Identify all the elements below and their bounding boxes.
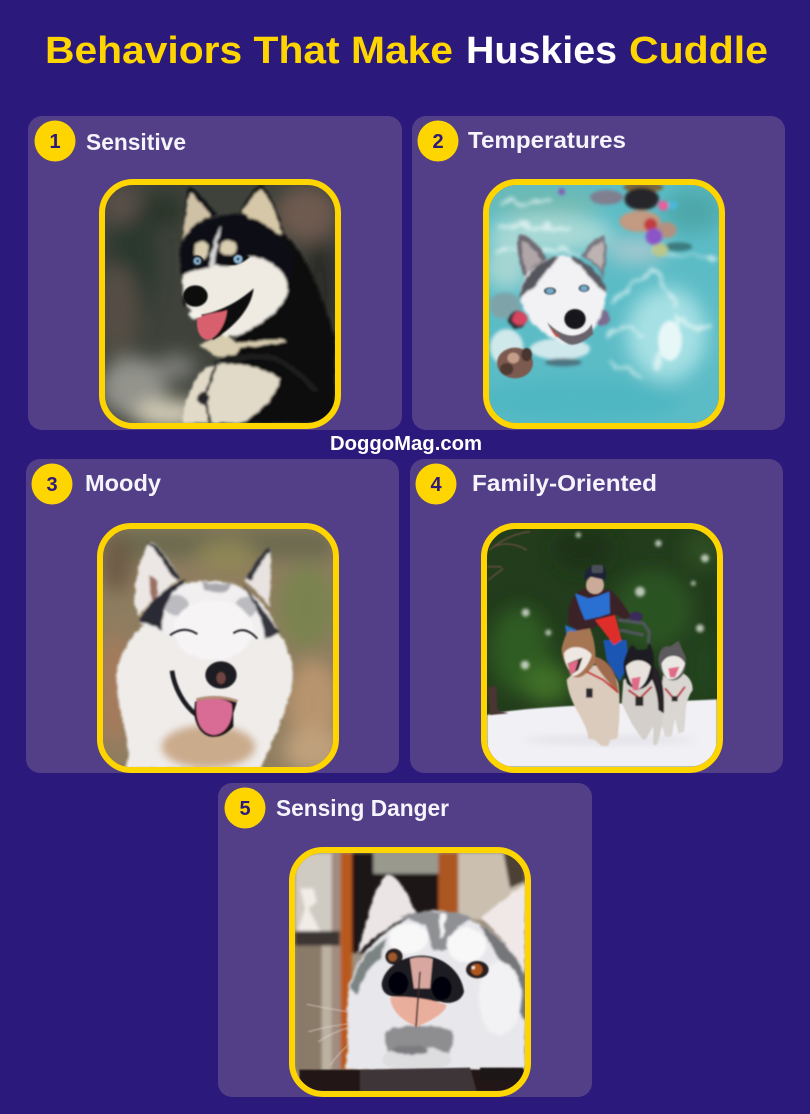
number badge 2 — [418, 120, 458, 162]
body — [220, 234, 335, 423]
number badge 3: 3 — [46, 474, 58, 496]
black head lines — [138, 579, 186, 632]
panel: temperatures — [412, 116, 785, 430]
ears — [357, 874, 416, 955]
number badge 1 — [34, 120, 76, 162]
title: Huskies — [466, 30, 617, 72]
eyes — [191, 255, 203, 267]
dog: left — [567, 665, 620, 746]
head — [178, 212, 294, 308]
photo: sled dog team with musher — [484, 526, 723, 770]
dog: right — [658, 671, 693, 737]
number badge 1: 1 — [49, 131, 61, 153]
ears — [135, 542, 180, 616]
number badge 4 — [416, 464, 456, 504]
number badge 5: 5 — [239, 798, 251, 820]
eyes — [385, 949, 403, 965]
head — [345, 910, 525, 1070]
mouth and tongue — [172, 671, 197, 715]
number badge 4: 4 — [430, 474, 442, 496]
eyes — [544, 287, 556, 295]
whiskers — [307, 1004, 353, 1065]
heading: family-oriented: Family-Oriented — [472, 470, 657, 496]
title: Cuddle — [629, 30, 768, 72]
musher — [568, 588, 632, 632]
snow — [487, 699, 717, 767]
eyes — [170, 630, 197, 635]
ears — [517, 234, 547, 281]
heading: sensing danger: Sensing Danger — [276, 795, 449, 821]
panel: sensitive — [28, 116, 402, 430]
number badge 3 — [32, 464, 72, 504]
dog: middle — [622, 673, 664, 745]
head — [520, 256, 606, 343]
panel: moody — [26, 459, 399, 773]
branches — [487, 532, 530, 580]
sled — [618, 620, 649, 643]
title — [45, 30, 768, 72]
nose and mouth — [201, 288, 254, 340]
photo: husky with harness — [93, 182, 338, 429]
title: Behaviors That Make — [45, 30, 453, 72]
heading: moody: Moody — [85, 470, 161, 496]
number badge 2: 2 — [432, 131, 444, 153]
nose — [205, 661, 237, 689]
website credit: DoggoMag.com — [330, 433, 482, 455]
photo: husky nose close-up — [292, 850, 528, 1094]
heading: sensitive: Sensitive — [86, 129, 186, 155]
body and ruff — [116, 613, 293, 768]
nose — [382, 956, 464, 1003]
photo: smiling husky — [97, 526, 343, 773]
panel: family-oriented — [410, 459, 783, 773]
paw — [497, 348, 533, 378]
mouth and nose — [547, 322, 593, 345]
ears — [182, 187, 217, 241]
table — [299, 1070, 526, 1092]
head — [138, 579, 279, 631]
collar — [509, 311, 526, 329]
photo: husky swimming in pool — [470, 182, 723, 426]
panel: sensing danger — [218, 783, 592, 1097]
number badge 5 — [224, 788, 266, 828]
heading: temperatures: Temperatures — [468, 127, 626, 153]
